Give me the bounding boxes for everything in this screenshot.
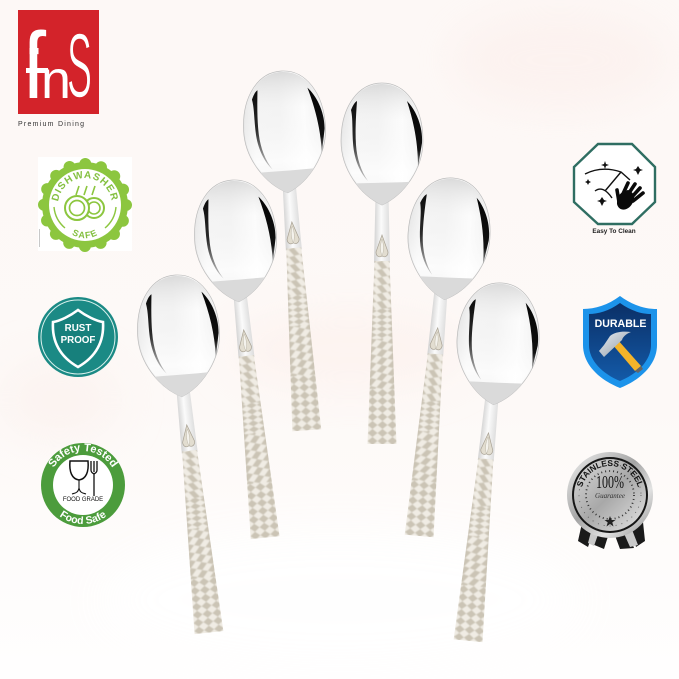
brand logo: S xyxy=(67,15,92,117)
spoon 6 xyxy=(448,280,547,644)
spoon 4 xyxy=(337,83,427,445)
badge: food safe: FOOD GRADE xyxy=(63,497,103,503)
spoon 5 xyxy=(399,175,498,539)
brand logo xyxy=(18,10,99,128)
badge: rust proof: RUST xyxy=(65,323,91,334)
badge: durable: DURABLE xyxy=(595,318,646,330)
badge: stainless steel guarantee: STAINLESS STEEL xyxy=(577,460,642,488)
badge: rust proof: PROOF xyxy=(61,335,95,346)
badge: easy to clean: Easy To Clean xyxy=(592,228,636,235)
badge: durable xyxy=(583,296,657,388)
spoon 1 xyxy=(131,273,229,636)
spoon 2 xyxy=(188,178,285,541)
badge: dishwasher safe: DISHWASHER xyxy=(52,171,118,201)
badge: stainless steel guarantee: 100% xyxy=(596,473,624,493)
badge: rust proof xyxy=(38,297,118,377)
badge: food safe: Food Safe xyxy=(60,510,106,524)
badge: food safe: Safety Tested xyxy=(48,443,118,468)
brand logo: Premium Dining xyxy=(18,121,85,128)
badge: easy to clean xyxy=(574,144,655,235)
spoon 3 xyxy=(237,69,333,433)
badge: dishwasher safe: SAFE xyxy=(72,230,98,238)
badge: dishwasher safe xyxy=(38,157,132,252)
badge: food safe xyxy=(41,443,125,527)
brand logo: f xyxy=(22,13,47,119)
badge: stainless steel guarantee xyxy=(567,452,653,549)
brand logo: n xyxy=(41,50,71,110)
badge: stainless steel guarantee: Guarantee xyxy=(595,492,625,500)
